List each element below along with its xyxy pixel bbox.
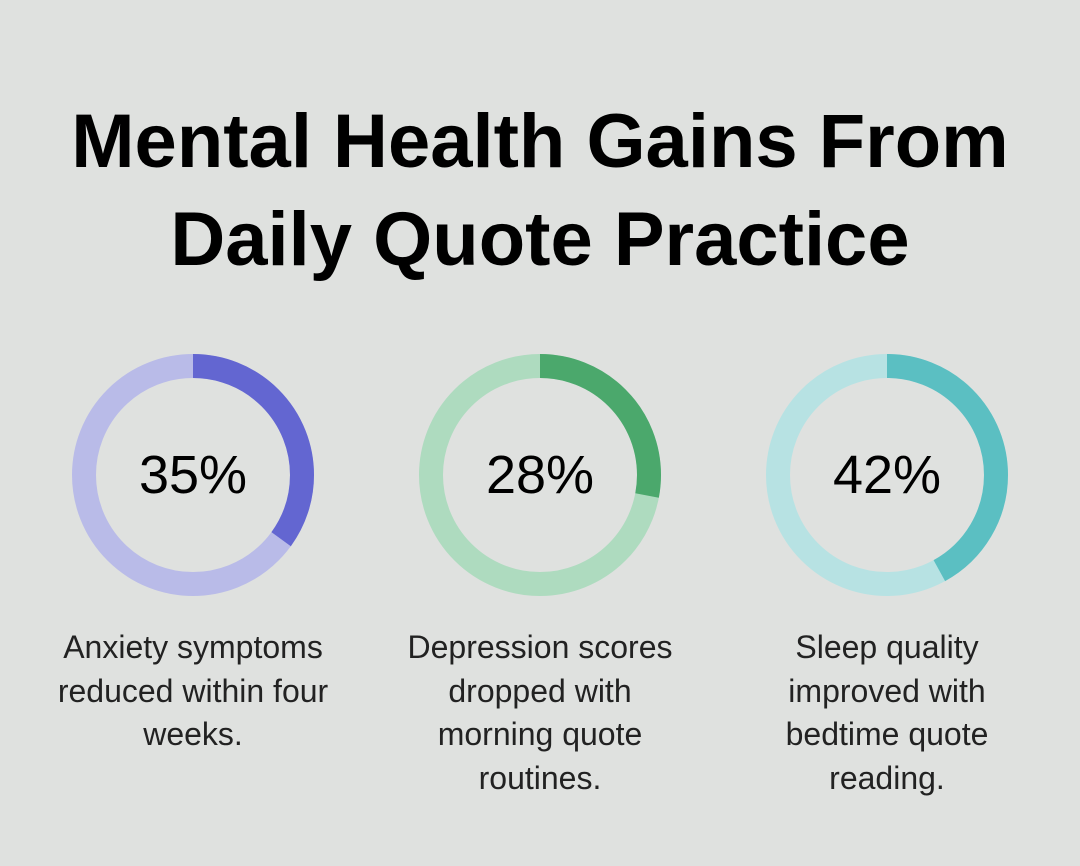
donut: depression 28%	[419, 354, 661, 596]
title: Daily Quote Practice	[170, 197, 910, 282]
caption: sleep: Sleep quality improved with bedtime quote reading.	[786, 629, 988, 796]
donut: depression 28%: 28%	[486, 445, 594, 505]
donut: anxiety 35%	[72, 354, 314, 596]
title	[71, 99, 1009, 282]
donut: sleep 42%	[766, 354, 1008, 596]
donut: sleep 42%: 42%	[833, 445, 941, 505]
title: Mental Health Gains From	[71, 99, 1009, 184]
caption: anxiety: Anxiety symptoms reduced within four weeks.	[58, 629, 328, 752]
donut: anxiety 35%: 35%	[139, 445, 247, 505]
caption: depression: Depression scores dropped with morning quote routines.	[408, 629, 672, 796]
